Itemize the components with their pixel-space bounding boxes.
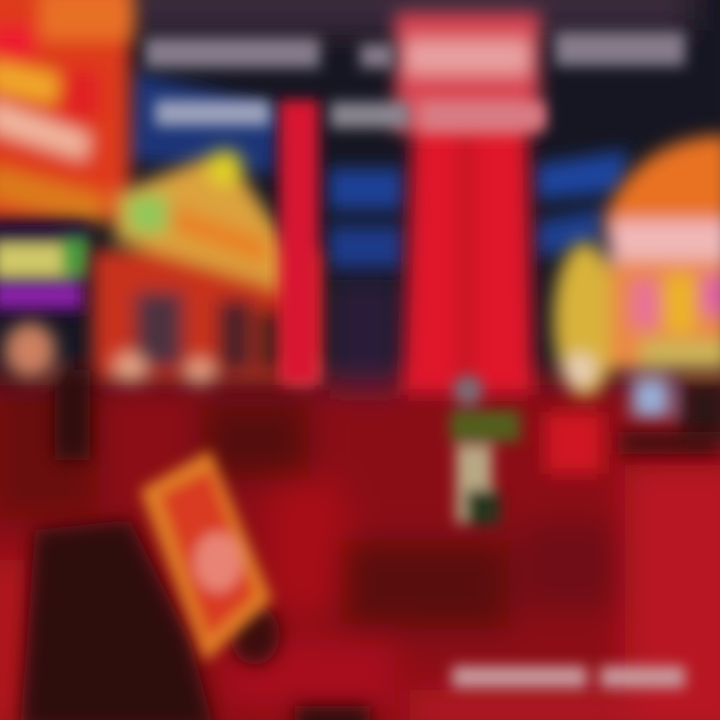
sign: top left casino facade — [0, 0, 135, 225]
column: thin red pillar — [279, 100, 319, 385]
card: orange tilted sign — [140, 450, 272, 662]
caption: bottom right blurred text — [452, 666, 685, 688]
shape: dark foreground silhouette — [20, 520, 370, 720]
title: blurred heading bars — [145, 32, 685, 130]
building: right orange dome booth — [553, 135, 720, 440]
column: main red tower — [395, 12, 540, 395]
blue light stripes — [120, 70, 628, 268]
crowd: dark seated figures — [4, 322, 720, 474]
figure: green central character — [450, 375, 520, 525]
building: yellow and green roofed booth — [92, 150, 320, 385]
neon panel: left purple and yellow — [0, 225, 90, 315]
